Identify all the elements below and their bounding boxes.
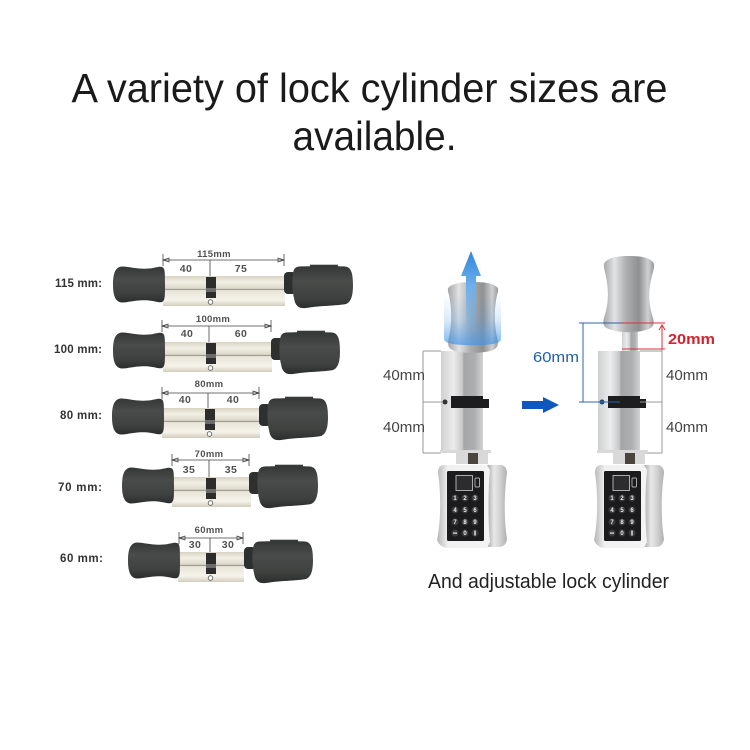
right keypad knob — [244, 540, 313, 583]
keys: 8 — [463, 520, 467, 526]
size label: 70 mm: 70 mm: — [58, 482, 102, 494]
cylinder cam slot — [205, 409, 215, 436]
keys: 4 — [453, 508, 457, 514]
size label: 60 mm: 60 mm: — [60, 553, 103, 565]
lock row: 70 mm — [58, 449, 318, 508]
dimension: 60 mm: 30 — [222, 539, 234, 551]
cylinder cam slot — [206, 343, 216, 370]
keys: 4 — [610, 508, 614, 514]
cylinder cam slot — [206, 277, 216, 304]
label: 40mm lower: 40mm — [383, 420, 425, 436]
cylinder body — [172, 477, 251, 507]
cylinder body — [178, 552, 244, 582]
dimension: 115 mm: 115mm — [197, 249, 231, 260]
keys: 8 — [620, 520, 624, 526]
phone icon — [632, 478, 636, 487]
blue lift glow — [444, 295, 501, 345]
left thumb knob — [122, 468, 174, 504]
keys: 1 — [453, 496, 457, 502]
right keypad knob — [259, 397, 328, 440]
size label: 100 mm: 100 mm: — [54, 344, 102, 356]
keys: 6 — [630, 508, 634, 514]
size label: 115 mm: 115 mm: — [55, 278, 102, 290]
cylinder body — [162, 408, 260, 438]
left thumb knob — [113, 266, 165, 302]
lock row: 80 mm — [60, 379, 328, 440]
dimension: 115 mm: 75 — [235, 263, 247, 275]
dimension: 80 mm: 80mm — [195, 379, 223, 390]
left thumb knob — [128, 542, 180, 578]
keys: 6 — [473, 508, 477, 514]
cylinder cam slot — [206, 478, 216, 505]
keypad body — [594, 465, 664, 548]
dimension: 100 mm: 100mm — [196, 314, 230, 325]
keys: 0 — [463, 531, 467, 537]
dimension lines — [423, 351, 443, 453]
steel knob — [603, 256, 654, 332]
keys: 9 — [473, 520, 477, 526]
keys — [452, 494, 478, 537]
fingerprint sensor — [456, 476, 472, 490]
size label: 80 mm: 80 mm: — [60, 410, 102, 422]
cylinder clip — [451, 396, 489, 408]
lock row: 115 mm — [55, 249, 353, 308]
right keypad knob — [284, 265, 353, 308]
keypad lock: left — [437, 450, 507, 548]
keys: 2 — [463, 496, 467, 502]
dimension: 100 mm: 60 — [235, 328, 247, 340]
60mm label: 60mm — [533, 349, 579, 366]
left thumb knob — [113, 332, 165, 368]
cylinder shaft — [441, 351, 483, 453]
keys: 5 — [463, 508, 467, 514]
dimension: 70 mm — [172, 449, 249, 477]
dimension: 100 mm: 40 — [181, 328, 193, 340]
keypad screen — [604, 471, 641, 541]
arrow: blue right — [522, 397, 559, 413]
dimension: 80 mm — [162, 379, 259, 409]
adjustable lock: before — [383, 251, 501, 453]
keys: 7 — [453, 520, 457, 526]
label: 40mm lower: 40mm — [666, 420, 708, 436]
keys: 2 — [620, 496, 624, 502]
exposed shaft — [622, 322, 638, 351]
keys: 3 — [473, 496, 477, 502]
20mm label: 20mm — [668, 331, 715, 348]
dimension: 80 mm: 40 — [227, 394, 239, 406]
collar — [597, 450, 648, 464]
dimension: 115 mm — [163, 249, 284, 277]
dimension: 70 mm: 70mm — [195, 449, 223, 460]
keypad body — [437, 465, 507, 548]
phone icon — [475, 478, 480, 487]
dimension: 70 mm: 35 — [183, 464, 195, 476]
dimension: 80 mm: 40 — [179, 394, 191, 406]
cylinder dot — [442, 400, 448, 404]
dimension: 70 mm: 35 — [225, 464, 237, 476]
lock row: 100 mm — [54, 314, 340, 374]
collar — [440, 450, 491, 464]
dimension: 100 mm — [162, 314, 271, 343]
lock row: 60 mm — [60, 525, 313, 583]
keypad lock: right — [594, 450, 664, 548]
label: 40mm upper: 40mm — [383, 368, 425, 384]
label: 40mm upper: 40mm — [666, 368, 708, 384]
60mm blue bracket — [579, 323, 622, 402]
dimension: 60 mm: 30 — [189, 539, 201, 551]
keys: 0 — [620, 531, 624, 537]
keypad screen — [447, 471, 484, 541]
20mm red bracket — [622, 323, 665, 349]
collar core — [625, 453, 635, 464]
title — [72, 65, 668, 159]
keys: 3 — [630, 496, 634, 502]
right keypad knob — [249, 465, 318, 508]
cylinder dot — [600, 400, 604, 404]
cylinder cam slot — [206, 553, 216, 580]
title: A variety of lock cylinder sizes are — [72, 65, 668, 111]
keys: 7 — [610, 520, 614, 526]
dimension: 115 mm: 40 — [180, 263, 192, 275]
keys — [608, 494, 636, 537]
left thumb knob — [112, 398, 164, 434]
title: available. — [292, 113, 456, 159]
keys: 5 — [620, 508, 624, 514]
blue up arrow — [461, 251, 481, 330]
right keypad knob — [271, 331, 340, 374]
adjustable lock: after — [533, 256, 715, 453]
cylinder body — [163, 276, 285, 306]
cylinder body — [163, 342, 272, 372]
fingerprint sensor — [613, 476, 630, 490]
caption: And adjustable lock cylinder — [428, 571, 669, 593]
dimension lines grey — [640, 349, 662, 453]
dimension: 60 mm: 60mm — [195, 525, 223, 536]
steel knob — [448, 282, 498, 353]
cylinder clip — [608, 396, 646, 408]
keys: 9 — [630, 520, 634, 526]
collar core — [468, 453, 478, 464]
dimension: 60 mm — [179, 525, 243, 553]
cylinder shaft — [598, 351, 640, 453]
keys: 1 — [610, 496, 614, 502]
